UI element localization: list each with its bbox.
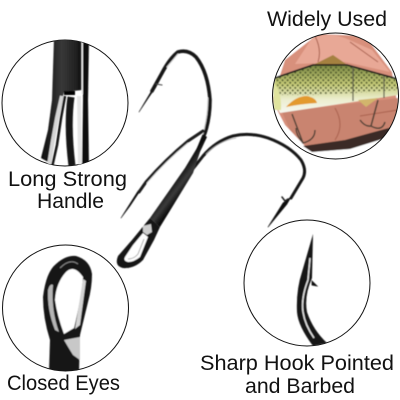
hook eye <box>117 218 160 268</box>
shadow <box>303 126 396 152</box>
pectoral fin <box>286 96 317 107</box>
lure body <box>273 65 398 113</box>
right hook prong <box>192 134 305 227</box>
panel: widely used lure photo <box>270 30 400 165</box>
label: sharp hook pointed and barbed: Sharp Hook Pointed <box>200 352 394 375</box>
label: long strong handle: Handle <box>37 190 104 213</box>
central treble hook <box>117 51 305 268</box>
panel: sharp hook point <box>244 220 370 346</box>
dorsal fin <box>313 55 346 65</box>
upper hook prong <box>139 51 210 150</box>
hook shank <box>150 135 207 227</box>
hook point detail <box>297 234 327 346</box>
handle detail <box>41 38 89 167</box>
label: closed eyes: Closed Eyes <box>7 372 120 395</box>
panel: closed eyes <box>2 245 128 372</box>
label: sharp hook pointed and barbed <box>200 352 394 398</box>
eye detail <box>43 256 92 372</box>
left hook prong <box>121 131 203 218</box>
panel: long strong handle <box>2 38 128 167</box>
label: widely used: Widely Used <box>267 8 387 31</box>
treble hooks on lure <box>292 114 315 143</box>
hand <box>272 34 400 146</box>
label: sharp hook pointed and barbed: and Barbed <box>245 375 355 398</box>
label: long strong handle: Long Strong <box>8 168 127 191</box>
label: long strong handle <box>8 168 127 213</box>
